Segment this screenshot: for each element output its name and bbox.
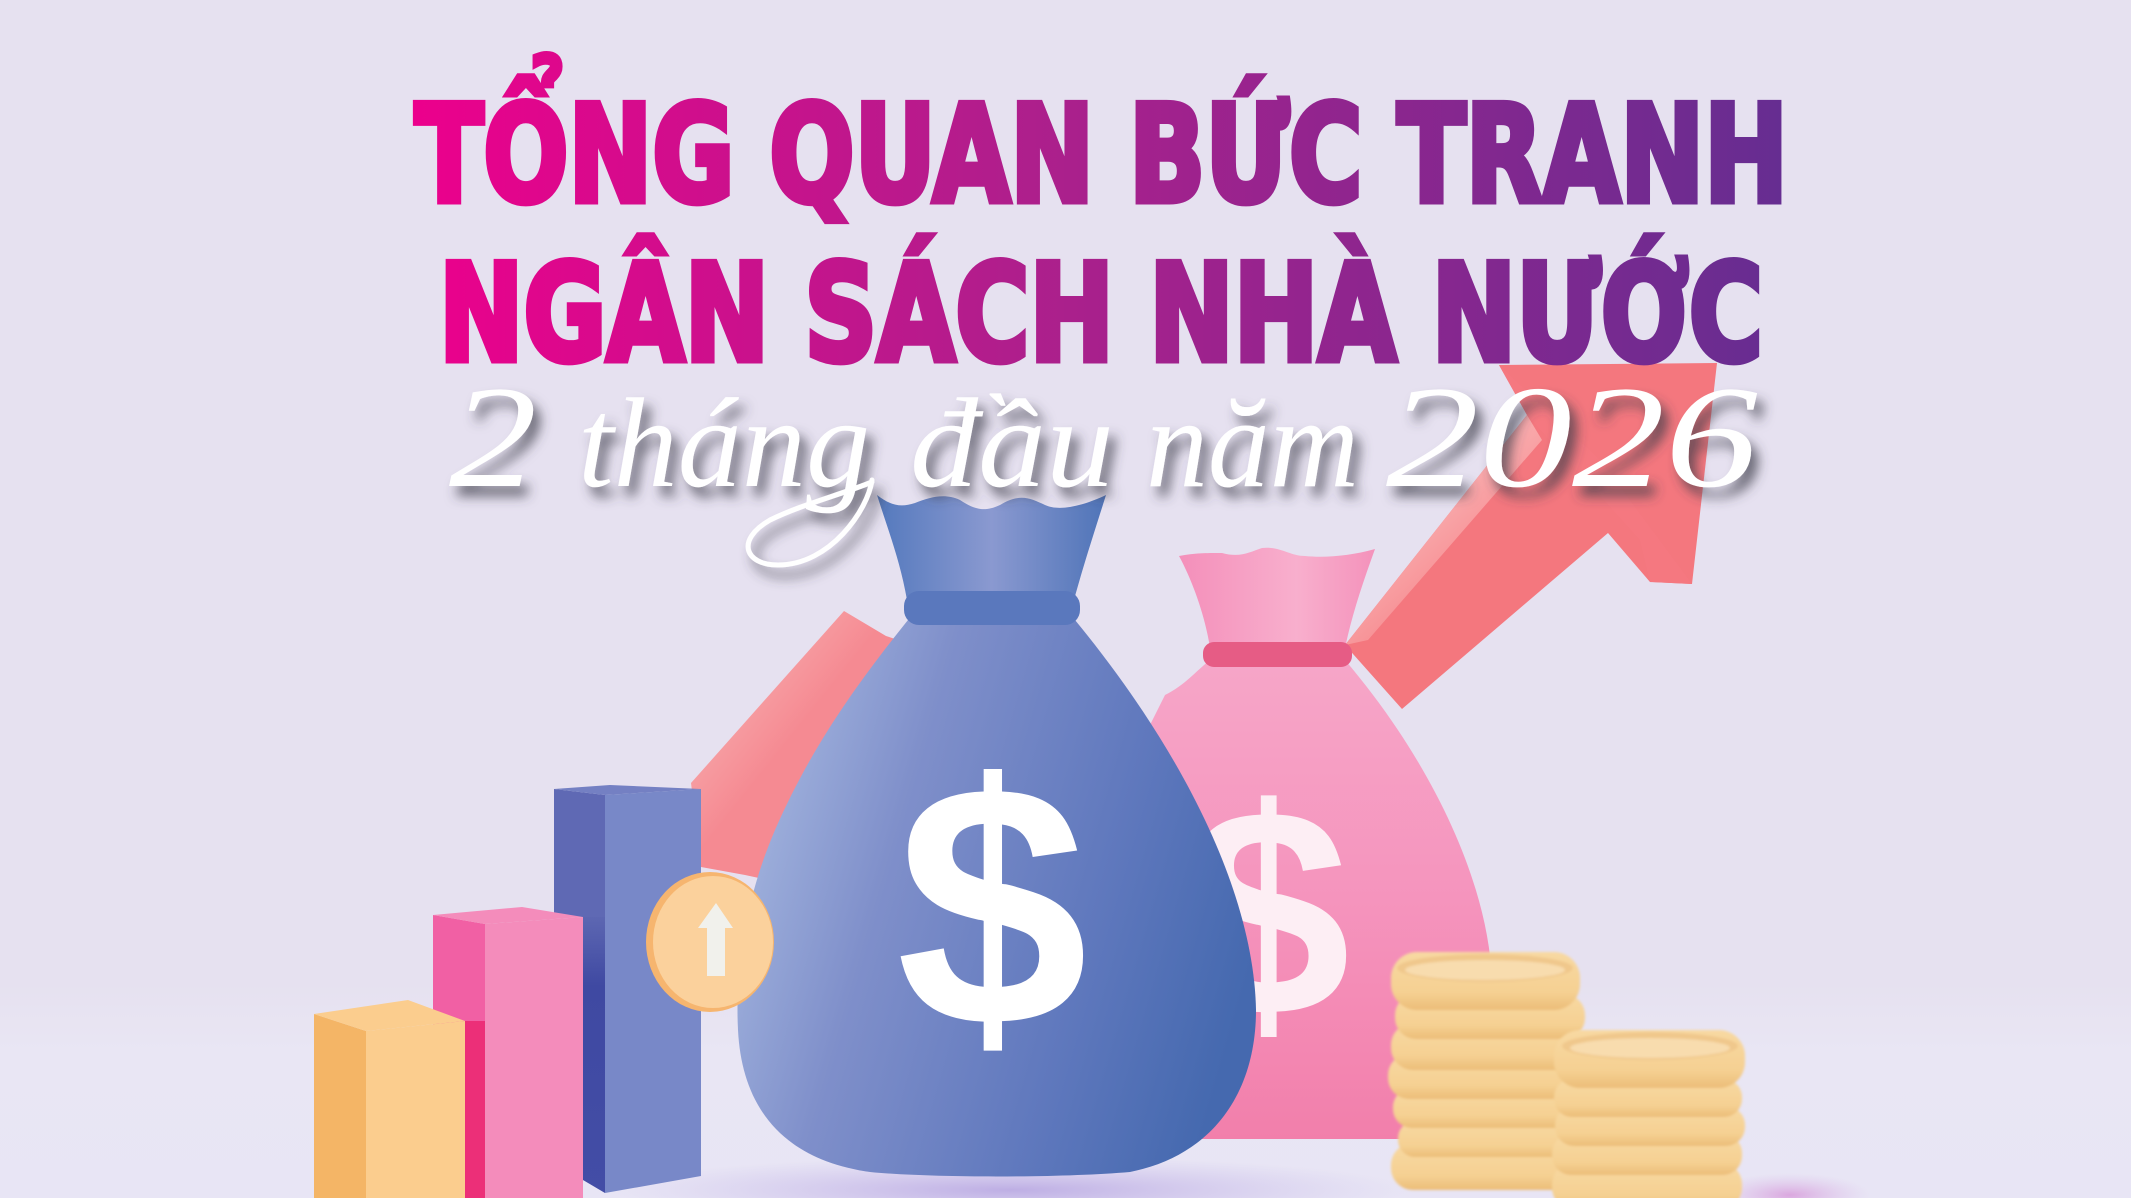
pink dollar sign: $ (1186, 747, 1350, 1078)
subtitle script (449, 356, 1758, 565)
blue bag tie (904, 591, 1080, 625)
orange bar (314, 1000, 465, 1198)
subtitle: năm: năm (1146, 372, 1359, 514)
coin stack: left (1388, 952, 1585, 1190)
pink bag body (1150, 660, 1492, 1139)
bar chart (314, 785, 701, 1198)
blue bag neck (877, 495, 1106, 600)
subtitle: 2026: 2026 (1386, 356, 1758, 518)
icon: orange coin with up arrow (646, 872, 774, 1012)
arrow: left rising segment (691, 611, 960, 900)
pink bag neck (1179, 548, 1375, 648)
subtitle: 2: 2 (449, 356, 537, 518)
title (415, 55, 1788, 392)
coin stack: right (1552, 1030, 1745, 1198)
blue dollar sign: $ (896, 714, 1088, 1099)
subtitle: tháng: tháng (578, 372, 870, 514)
pink bar (433, 907, 583, 1198)
ground shadows (610, 1156, 1870, 1198)
subtitle: đầu: đầu (910, 372, 1114, 514)
blue bag body (737, 620, 1256, 1176)
subtitle g flourish (748, 480, 872, 565)
pink money bag (1150, 548, 1492, 1139)
arrow: right rising arrow (1345, 363, 1717, 709)
blue bar (554, 785, 701, 1193)
pink bag tie (1203, 642, 1352, 667)
blue money bag (737, 495, 1256, 1176)
